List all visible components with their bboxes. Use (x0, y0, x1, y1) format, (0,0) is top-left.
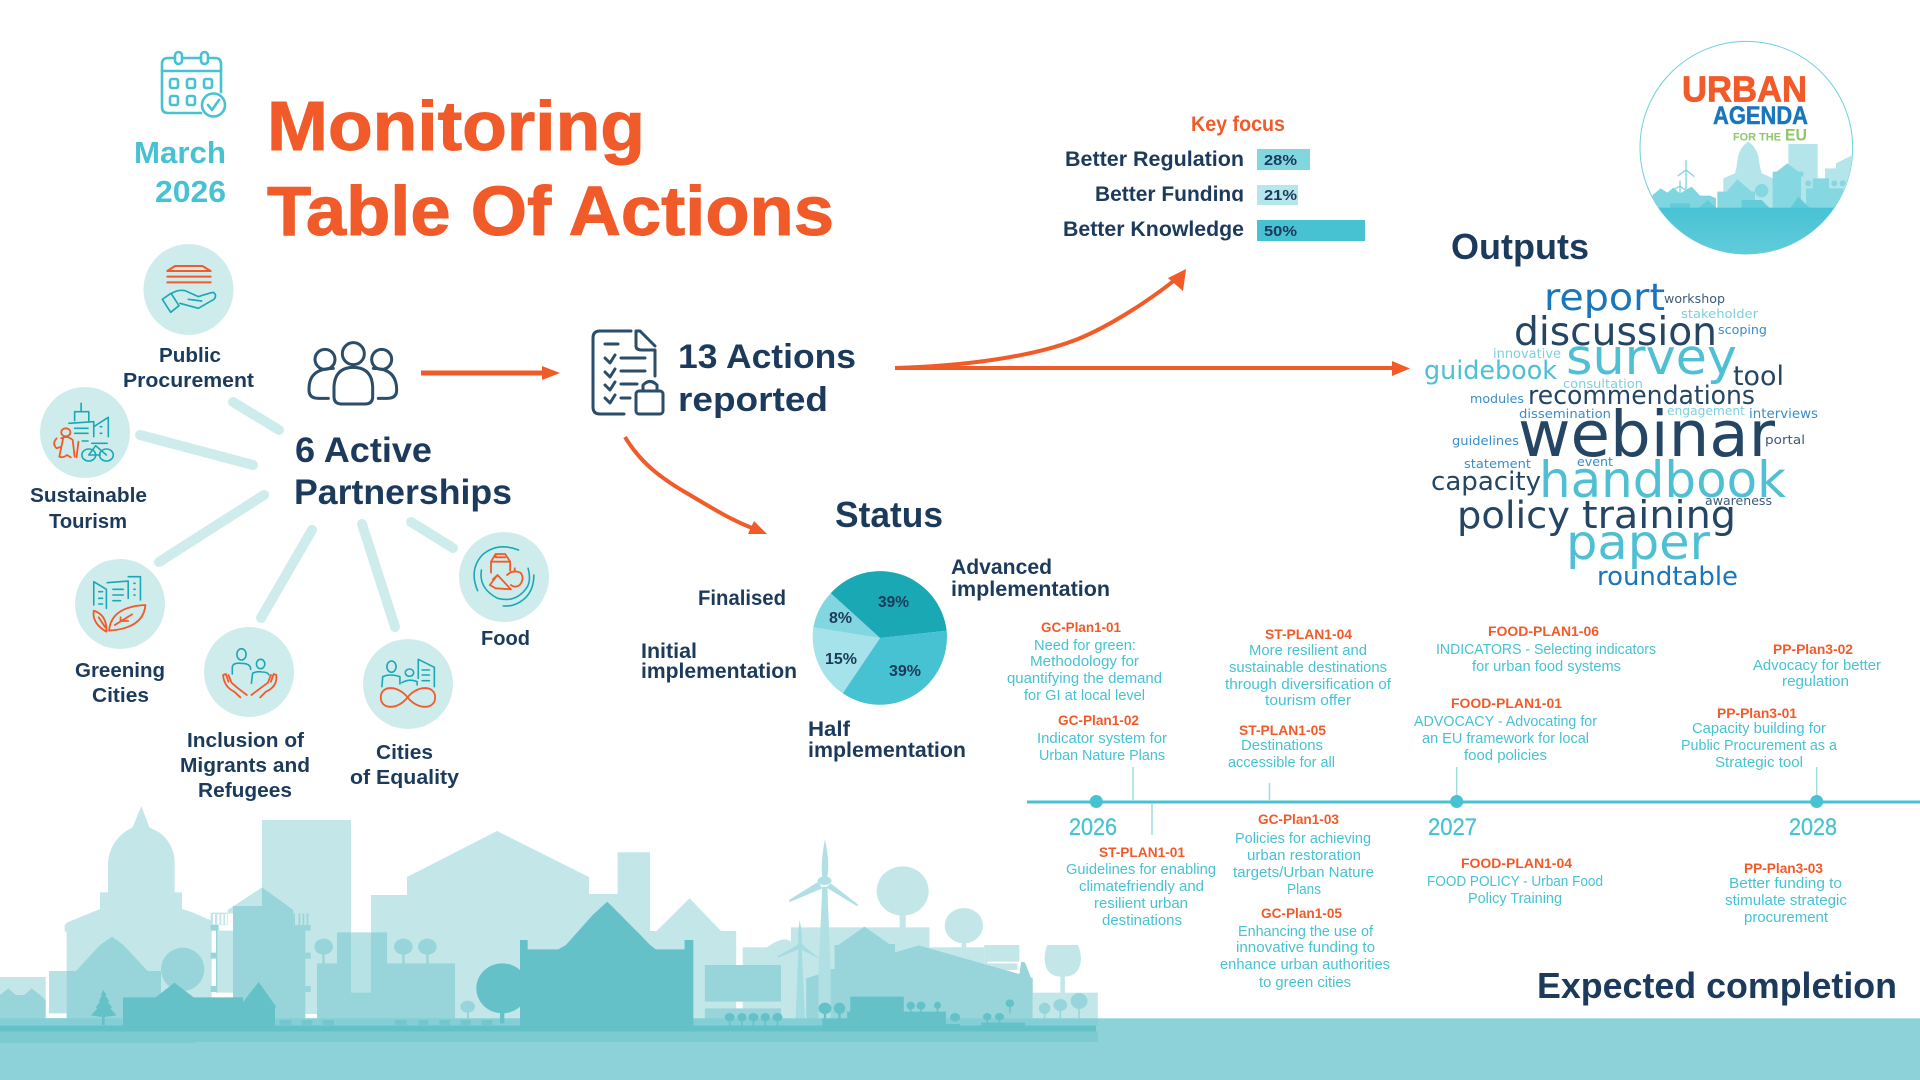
timeline years (1069, 814, 1837, 841)
action: GC-Plan1-01: for GI at local level (1024, 687, 1145, 704)
word cloud: outputs: webinar (1518, 398, 1775, 471)
word cloud: outputs: modules (1470, 391, 1524, 406)
logo wordmark (1682, 68, 1808, 145)
action: GC-Plan1-01: quantifying the demand (1007, 670, 1162, 687)
action: ST-PLAN1-04: ST-PLAN1-04 (1265, 626, 1352, 642)
bar values (1264, 152, 1297, 240)
word cloud: outputs: event (1577, 454, 1613, 469)
word cloud: outputs: tool (1733, 361, 1784, 392)
word cloud: outputs: portal (1765, 432, 1805, 447)
arrow: actions to key focus (895, 269, 1186, 368)
icon: partnership people (309, 343, 397, 404)
label: cities of equality (350, 742, 460, 789)
action: PP-Plan3-01: Capacity building for (1692, 720, 1826, 737)
action: ST-PLAN1-04: through diversification of (1225, 676, 1392, 693)
pie labels: Advanced (951, 556, 1052, 579)
action: ST-PLAN1-04: sustainable destinations (1229, 659, 1387, 676)
action: GC-Plan1-02: Urban Nature Plans (1039, 747, 1165, 764)
word cloud: outputs: survey (1566, 329, 1737, 386)
action: PP-Plan3-03: stimulate strategic (1725, 892, 1847, 909)
row labels: Better Knowledge (1063, 218, 1244, 241)
word cloud: outputs: scoping (1718, 322, 1767, 337)
action: ST-PLAN1-05 (1228, 722, 1335, 771)
chart: key focus (1063, 113, 1365, 241)
word cloud: outputs: workshop (1664, 291, 1725, 306)
action: FOOD-PLAN1-01: FOOD-PLAN1-01 (1451, 695, 1562, 711)
action: GC-Plan1-05: to green cities (1259, 974, 1351, 991)
panel: cities of equality (350, 639, 460, 789)
action: ST-PLAN1-01: Guidelines for enabling (1066, 861, 1216, 878)
pie labels: implementation (951, 578, 1110, 601)
action: GC-Plan1-03: targets/Urban Nature (1233, 864, 1374, 881)
date: 2026 (155, 174, 226, 209)
pie labels: Half (808, 718, 851, 741)
action: GC-Plan1-02: Indicator system for (1037, 730, 1167, 747)
logo wordmark: AGENDA (1713, 102, 1808, 130)
action: PP-Plan3-01 (1681, 705, 1838, 771)
action: FOOD-PLAN1-06 (1436, 623, 1656, 675)
icon: buildings and leaf (94, 577, 145, 632)
label: food: Food (481, 628, 530, 650)
action: FOOD-PLAN1-01: an EU framework for local (1422, 730, 1589, 747)
icon: document checklist (593, 331, 663, 414)
icon: people and infinity (381, 659, 435, 707)
panel: sustainable tourism (30, 387, 147, 533)
timeline years: 2027 (1428, 814, 1477, 841)
logo wordmark: EU (1785, 126, 1807, 145)
action: GC-Plan1-05: enhance urban authorities (1220, 956, 1390, 973)
pie labels (641, 556, 1110, 762)
logo wordmark: FOR THE (1733, 132, 1781, 144)
heading: 6 active partnerships: 6 Active (295, 431, 432, 470)
action: GC-Plan1-02 (1037, 712, 1167, 764)
heading: 6 active partnerships (294, 431, 512, 512)
bar values: 50% (1264, 223, 1297, 240)
action: PP-Plan3-02: PP-Plan3-02 (1773, 641, 1853, 657)
logo wordmark: URBAN (1682, 68, 1807, 110)
word cloud: outputs: recommendations (1528, 381, 1755, 411)
action: PP-Plan3-01: Public Procurement as a (1681, 737, 1838, 754)
action: ST-PLAN1-04: More resilient and (1249, 642, 1367, 659)
action: ST-PLAN1-05: accessible for all (1228, 754, 1335, 771)
logo: urban agenda for the eu (1630, 41, 1863, 256)
word cloud: outputs: roundtable (1597, 562, 1738, 592)
action: FOOD-PLAN1-06: INDICATORS - Selecting indicators (1436, 641, 1656, 658)
action: FOOD-PLAN1-06: FOOD-PLAN1-06 (1488, 623, 1599, 639)
word cloud: outputs: stakeholder (1681, 306, 1759, 321)
partnership connector lines (140, 402, 453, 627)
action: FOOD-PLAN1-04: FOOD POLICY - Urban Food (1427, 873, 1603, 890)
heading: 6 active partnerships: Partnerships (294, 473, 512, 512)
action: GC-Plan1-05: innovative funding to (1236, 939, 1375, 956)
action: GC-Plan1-02: GC-Plan1-02 (1058, 712, 1139, 728)
word cloud: outputs: innovative (1493, 347, 1561, 362)
label: public procurement (123, 345, 254, 392)
bars (1257, 149, 1365, 241)
action: FOOD-PLAN1-01 (1414, 695, 1597, 764)
label: public procurement: Procurement (123, 370, 254, 392)
label: inclusion of migrants and refugees: Refugees (198, 780, 292, 802)
action: PP-Plan3-03: procurement (1744, 909, 1829, 926)
word cloud: outputs: paper (1566, 515, 1710, 571)
action: GC-Plan1-05: GC-Plan1-05 (1261, 905, 1342, 921)
row labels (1063, 148, 1244, 241)
action: PP-Plan3-03 (1725, 860, 1847, 926)
word cloud: outputs: guidelines (1452, 433, 1519, 448)
action: ST-PLAN1-05: ST-PLAN1-05 (1239, 722, 1326, 738)
action: ST-PLAN1-04 (1225, 626, 1392, 709)
arrow: actions to outputs (895, 361, 1410, 376)
action: GC-Plan1-03: Plans (1287, 881, 1321, 898)
action: FOOD-PLAN1-04 (1427, 855, 1603, 907)
action: ST-PLAN1-01: climatefriendly and (1079, 878, 1204, 895)
heading: outputs: Outputs (1451, 226, 1589, 267)
action: PP-Plan3-02 (1753, 641, 1881, 690)
bar values: 28% (1264, 152, 1297, 169)
date (134, 135, 226, 209)
panel: inclusion of migrants and refugees (180, 627, 310, 802)
action: GC-Plan1-03 (1233, 811, 1374, 898)
heading: 13 actions reported: reported (678, 381, 828, 419)
timeline years: 2026 (1069, 814, 1117, 841)
label: sustainable tourism: Tourism (49, 511, 127, 533)
panel: food (459, 532, 549, 650)
action: PP-Plan3-02: Advocacy for better (1753, 657, 1881, 674)
label: sustainable tourism: Sustainable (30, 485, 147, 507)
pie labels: implementation (641, 660, 797, 683)
row labels: Better Regulation (1065, 148, 1244, 171)
bar values: 21% (1264, 187, 1297, 204)
arrow: actions to status (625, 437, 767, 534)
label: inclusion of migrants and refugees: Migrants and (180, 755, 310, 777)
action: FOOD-PLAN1-01: food policies (1464, 747, 1547, 764)
title: Monitoring (267, 87, 645, 165)
action: FOOD-PLAN1-01: ADVOCACY - Advocating for (1414, 713, 1597, 730)
icon: hand with documents (162, 266, 216, 312)
action: GC-Plan1-03: urban restoration (1247, 847, 1361, 864)
heading: key focus: Key focus (1191, 113, 1285, 136)
row labels: Better Funding (1095, 183, 1244, 206)
action: GC-Plan1-01: Need for green: (1034, 637, 1136, 654)
label: sustainable tourism (30, 485, 147, 533)
pie labels: Initial (641, 640, 697, 663)
word cloud: outputs: policy (1457, 494, 1570, 537)
word cloud: outputs: consultation (1563, 376, 1643, 391)
icon: city, hiker and bike (54, 403, 113, 461)
pie values: 8% (829, 610, 852, 627)
pie values (825, 594, 921, 680)
action: GC-Plan1-05: Enhancing the use of (1238, 923, 1374, 940)
pie labels: implementation (808, 739, 966, 762)
label: greening cities (75, 660, 165, 707)
skyline illustration (0, 806, 1920, 1080)
title (267, 87, 834, 250)
action: PP-Plan3-01: Strategic tool (1715, 754, 1803, 771)
word cloud: outputs: capacity (1431, 467, 1541, 497)
word cloud: outputs: interviews (1749, 407, 1818, 422)
word cloud: outputs: dissemination (1519, 406, 1611, 421)
word cloud: outputs: report (1544, 276, 1665, 319)
action: GC-Plan1-05 (1220, 905, 1390, 991)
label: public procurement: Public (159, 345, 221, 367)
pie values: 15% (825, 651, 857, 668)
pie labels: Finalised (698, 587, 786, 610)
action: FOOD-PLAN1-04: Policy Training (1468, 890, 1562, 907)
action: ST-PLAN1-01: ST-PLAN1-01 (1099, 844, 1185, 860)
panel: public procurement (123, 244, 254, 392)
label: greening cities: Cities (92, 685, 149, 707)
action: ST-PLAN1-04: tourism offer (1265, 692, 1351, 709)
label: cities of equality: of Equality (350, 767, 460, 789)
word cloud: outputs: awareness (1705, 493, 1772, 508)
action: ST-PLAN1-05: Destinations (1241, 737, 1323, 754)
action: ST-PLAN1-01: resilient urban (1094, 895, 1188, 912)
label: cities of equality: Cities (376, 742, 433, 764)
label: inclusion of migrants and refugees: Inclusion of (187, 730, 304, 752)
arrow: partnerships to actions (421, 366, 560, 380)
word cloud: outputs: statement (1464, 456, 1531, 471)
action: PP-Plan3-01: PP-Plan3-01 (1717, 705, 1797, 721)
chart: status pie (813, 571, 947, 705)
word cloud: outputs: discussion (1514, 310, 1717, 355)
panel: greening cities (75, 559, 165, 707)
title: Table Of Actions (267, 172, 834, 250)
word cloud: outputs: handbook (1539, 451, 1786, 509)
word cloud: outputs (1424, 276, 1818, 592)
action: FOOD-PLAN1-06: for urban food systems (1472, 658, 1621, 675)
date: March (134, 135, 226, 170)
action: ST-PLAN1-01: destinations (1102, 912, 1182, 929)
pie values: 39% (889, 663, 921, 680)
icon: calendar (162, 52, 225, 116)
label: greening cities: Greening (75, 660, 165, 682)
action: GC-Plan1-03: GC-Plan1-03 (1258, 811, 1339, 827)
icon: people in hands (223, 649, 276, 697)
action: GC-Plan1-01: GC-Plan1-01 (1041, 619, 1121, 635)
pie values: 39% (878, 594, 909, 611)
heading: 13 actions reported: 13 Actions (678, 338, 856, 376)
action: GC-Plan1-03: Policies for achieving (1235, 830, 1371, 847)
timeline years: 2028 (1789, 814, 1837, 841)
word cloud: outputs: guidebook (1424, 356, 1557, 386)
action: GC-Plan1-01 (1007, 619, 1162, 704)
action: FOOD-PLAN1-04: FOOD-PLAN1-04 (1461, 855, 1572, 871)
icon: food cycle (474, 547, 534, 606)
action: ST-PLAN1-01 (1066, 844, 1216, 929)
label: inclusion of migrants and refugees (180, 730, 310, 802)
action: PP-Plan3-03: Better funding to (1729, 875, 1842, 892)
action: PP-Plan3-03: PP-Plan3-03 (1744, 860, 1823, 876)
chart: timeline (1027, 767, 1920, 841)
word cloud: outputs: engagement (1667, 403, 1745, 418)
heading: status: Status (835, 494, 943, 535)
action: PP-Plan3-02: regulation (1782, 673, 1849, 690)
action: GC-Plan1-01: Methodology for (1030, 653, 1139, 670)
heading: 13 actions reported (678, 338, 856, 419)
word cloud: outputs: training (1582, 493, 1736, 537)
heading: expected completion: Expected completion (1537, 965, 1897, 1006)
